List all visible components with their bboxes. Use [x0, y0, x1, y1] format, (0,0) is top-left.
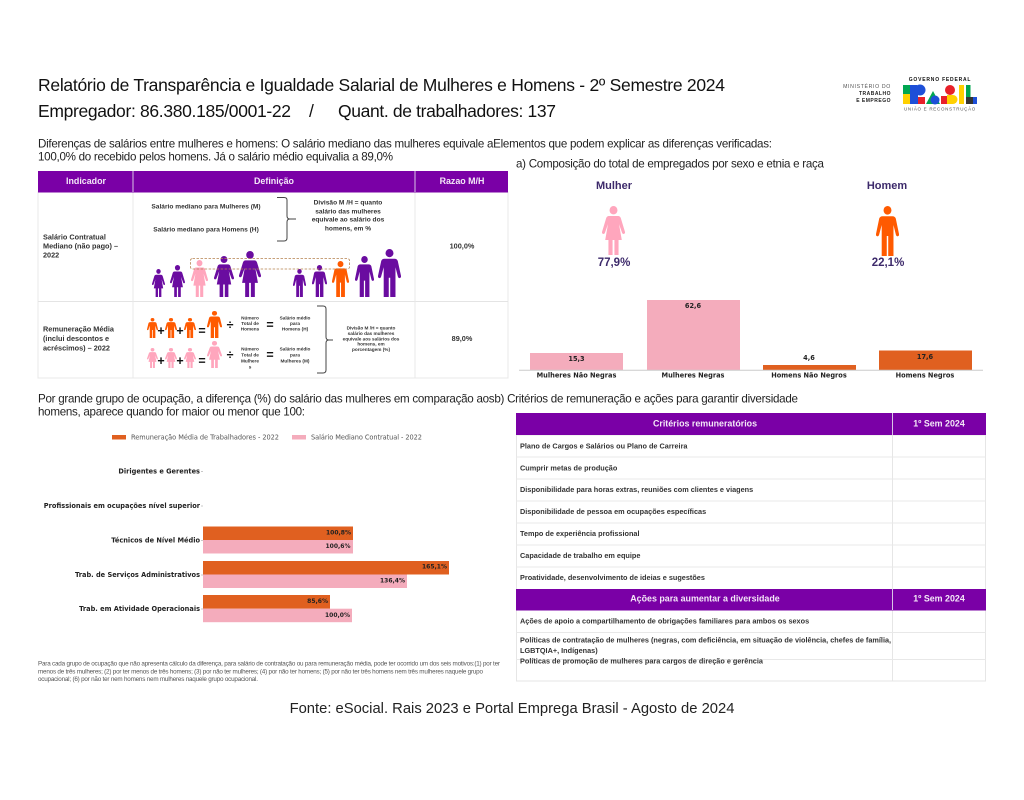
- action rows: Ações de apoio a compartilhamento de obrigações familiares para ambos os sexos: [520, 616, 809, 626]
- criteria rows: Disponibilidade para horas extras, reuniões com clientes e viagens: [520, 485, 753, 494]
- row label: remuneração média: acréscimos) – 2022: [43, 344, 110, 352]
- bar: homens negros: 17,6: [917, 353, 934, 361]
- action rows: LGBTQIA+, Indígenas): [520, 646, 598, 655]
- equation: homens: Número: [241, 316, 259, 320]
- equation: mulheres: s: [249, 364, 252, 370]
- footnote: [38, 660, 500, 683]
- definition: divisão M/H mediano: homens, em %: [325, 226, 371, 232]
- bars: serviços administrativos: 165,1%: [422, 564, 447, 570]
- logo: ministério do trabalho e governo federal: [843, 77, 977, 112]
- logo: ministério do trabalho e governo federal: E EMPREGO: [856, 98, 891, 104]
- table header: Definição: [254, 176, 295, 186]
- logo: ministério do trabalho e governo federal: GOVERNO FEDERAL: [909, 77, 971, 83]
- equation: mulheres: Salário médio: [280, 346, 311, 352]
- logo: ministério do trabalho e governo federal: UNIÃO E RECONSTRUÇÃO: [904, 106, 976, 112]
- panel: tabela de indicadores: [38, 171, 508, 378]
- table header: [38, 171, 508, 192]
- equation: mulheres: para: [290, 352, 300, 358]
- homem: 22,1%: [872, 257, 904, 269]
- criteria rows: Plano de Cargos e Salários ou Plano de Carreira: [520, 442, 688, 450]
- equation: homens: +: [157, 324, 165, 338]
- legend: [112, 434, 422, 442]
- action rows: [520, 616, 891, 666]
- equation: homens: Total de: [241, 321, 259, 326]
- heading: diferença por grande grupo de ocupação: Por grande grupo de ocupação, a diferença (%) do salário das mulheres em comparação aosb) Critérios de remuneração e ações para garantir diversidade: [38, 392, 798, 406]
- criteria rows: Cumprir metas de produção: [520, 464, 618, 472]
- panel: composição por sexo: [596, 180, 907, 269]
- header: ações para aumentar a diversidade: [516, 589, 986, 610]
- footnote: ocupacional; (6) por não ter nem homens nem mulheres naquele grupo ocupacional.: [38, 676, 258, 683]
- equation: mulheres: Mulhere: [241, 358, 259, 364]
- heading: composição do total de empregados: a) Composição do total de empregados por sexo e etnia e raça: [516, 158, 825, 170]
- bars: técnicos de nível médio: 100,8%: [326, 530, 351, 536]
- definition: salário mediano labels: Salário mediano para Mulheres (M): [151, 204, 261, 210]
- equation: homens: Homens (H): [282, 326, 309, 332]
- mulher: Mulher: [596, 180, 633, 192]
- row label: salário contratual mediano: 2022: [43, 250, 59, 260]
- dashed box: medianas: [190, 258, 350, 269]
- footnote: menos de três mulheres; (2) por ter menos de três homens; (3) por não ter mulheres; (4) por não ter homens; (5) por não ter três homens nem três mulheres naquele grupo: [38, 668, 483, 676]
- bar: mulheres negras: Mulheres Negras: [662, 372, 725, 380]
- row label: remuneração média: (inclui descontos e: [43, 334, 109, 343]
- equation: mulheres: Total de: [241, 352, 259, 358]
- row label: remuneração média: Remuneração Média: [43, 324, 115, 334]
- definition: divisão M/H média: salário das mulheres: [348, 331, 395, 336]
- logo: ministério do trabalho e governo federal: TRABALHO: [859, 91, 891, 97]
- bar chart: empregados por sexo e raça: [519, 300, 983, 380]
- intro text: diferenças de salários: [38, 138, 772, 164]
- mulher: [596, 180, 633, 269]
- chart: diferença por ocupação: [44, 434, 449, 622]
- intro text: diferenças de salários: Diferenças de salários entre mulheres e homens: O salário mediano das mulheres equivale aElementos que podem explicar as diferenças verificadas:: [38, 138, 772, 150]
- equation: homens: =: [266, 318, 274, 332]
- criteria rows: [520, 442, 753, 582]
- title: Relatório de Transparência e Igualdade Salarial de Mulheres e Homens - 2º Semestre 2024: [38, 75, 725, 95]
- header: ações para aumentar a diversidade: 1º Sem 2024: [913, 594, 965, 604]
- equation: homens: Salário médio: [280, 316, 311, 320]
- definition: salário mediano labels: [151, 204, 261, 234]
- title: Empregador: 86.380.185/0001-22: [38, 101, 291, 121]
- equation: homens: =: [198, 324, 206, 338]
- equation: mulheres: Mulheres (M): [281, 358, 310, 364]
- criteria rows: Capacidade de trabalho em equipe: [520, 551, 640, 560]
- category labels: Trab. de Serviços Administrativos: [75, 571, 200, 579]
- logo: ministério do trabalho e governo federal: MINISTÉRIO DO: [843, 83, 891, 90]
- heading: diferença por grande grupo de ocupação: [38, 392, 798, 418]
- definition: divisão M/H média: homens, em: [357, 342, 385, 346]
- equation: homens: Homens: [241, 326, 260, 332]
- criteria rows: Proatividade, desenvolvimento de ideias e sugestões: [520, 573, 705, 582]
- equation: mulheres: ÷: [227, 348, 234, 362]
- equation: mulheres: =: [266, 348, 274, 362]
- legend: Remuneração Média de Trabalhadores - 2022: [131, 434, 279, 442]
- definition: divisão M/H mediano: Divisão M /H = quanto: [314, 200, 382, 206]
- mulher: 77,9%: [598, 257, 630, 269]
- equation: mulheres: Número: [241, 346, 259, 352]
- equation: homens: [147, 311, 311, 338]
- bar: mulheres negras: [647, 300, 740, 380]
- icons: fila de homens: [293, 249, 401, 297]
- title: /: [309, 101, 314, 121]
- bar: homens não negros: Homens Não Negros: [771, 372, 847, 380]
- equation: mulheres: +: [176, 354, 184, 368]
- row label: salário contratual mediano: Salário Contratual: [43, 232, 106, 242]
- value: razão média: 89,0%: [452, 334, 473, 343]
- panel: critérios e ações: [516, 413, 986, 681]
- action rows: Políticas de contratação de mulheres (negras, com deficiência, em situação de violência, chefes de família,: [520, 636, 891, 644]
- definition: divisão M/H mediano: [312, 200, 385, 232]
- category labels: Trab. em Atividade Operacionais: [79, 605, 200, 613]
- definition: divisão M/H média: Divisão M /H = quanto: [347, 326, 396, 330]
- equation: homens: ÷: [227, 318, 234, 332]
- title: [38, 75, 725, 121]
- heading: diferença por grande grupo de ocupação: homens, aparece quando for maior ou menor que 100:: [38, 406, 305, 418]
- definition: divisão M/H mediano: salário das mulheres: [315, 208, 381, 216]
- definition: divisão M/H média: [343, 326, 400, 352]
- bars: atividade operacionais: 85,6%: [307, 598, 328, 605]
- table header: Razao M/H: [440, 176, 484, 186]
- bar: mulheres negras: 62,6: [685, 302, 702, 310]
- category labels: [44, 468, 203, 613]
- value: razão mediana: 100,0%: [450, 242, 475, 250]
- criteria rows: Disponibilidade de pessoa em ocupações específicas: [520, 507, 706, 516]
- definition: divisão M/H média: equivale aos salários dos: [343, 336, 400, 342]
- header: critérios remuneratórios: [516, 413, 986, 435]
- definition: salário mediano labels: Salário mediano para Homens (H): [153, 226, 259, 234]
- equation: mulheres: =: [198, 354, 206, 368]
- bars: técnicos de nível médio: [203, 526, 353, 554]
- brace: mediano: [277, 198, 296, 241]
- category labels: Dirigentes e Gerentes: [118, 468, 200, 476]
- bar: mulheres não negras: [530, 353, 623, 380]
- bar: homens não negros: 4,6: [803, 354, 815, 362]
- bars: atividade operacionais: 100,0%: [325, 612, 350, 619]
- legend: Salário Mediano Contratual - 2022: [311, 434, 422, 442]
- bar: homens negros: Homens Negros: [896, 372, 954, 380]
- equation: mulheres: [147, 341, 311, 370]
- row label: remuneração média: [43, 324, 115, 352]
- action rows: Políticas de promoção de mulheres para cargos de direção e gerência: [520, 656, 764, 666]
- criteria rows: Tempo de experiência profissional: [520, 529, 640, 538]
- footnote: Para cada grupo de ocupação que não apresenta cálculo da diferença, para salário de contratação ou para remuneração média, pode ter ocorrido um dos seis motivos:(1) por ter: [38, 660, 500, 668]
- row label: salário contratual mediano: [43, 232, 118, 260]
- bar: mulheres não negras: Mulheres Não Negras: [537, 372, 616, 380]
- header: critérios remuneratórios: 1º Sem 2024: [913, 418, 965, 428]
- row label: salário contratual mediano: Mediano (não pago) –: [43, 242, 118, 250]
- brace: média: [317, 306, 333, 373]
- homem: [867, 180, 907, 269]
- equation: homens: +: [176, 324, 184, 338]
- table header: Indicador: [66, 176, 107, 186]
- bar: homens não negros: [763, 354, 856, 380]
- bars: serviços administrativos: [203, 561, 449, 588]
- category labels: Técnicos de Nível Médio: [111, 536, 200, 544]
- title: Quant. de trabalhadores: 137: [338, 101, 556, 121]
- source: Fonte: eSocial. Rais 2023 e Portal Emprega Brasil - Agosto de 2024: [290, 701, 734, 717]
- category labels: Profissionais em ocupações nível superior: [44, 502, 201, 510]
- header: critérios remuneratórios: Critérios remuneratórios: [653, 418, 757, 428]
- homem: Homem: [867, 180, 907, 192]
- bars: técnicos de nível médio: 100,6%: [326, 543, 350, 550]
- intro text: diferenças de salários: 100,0% do recebido pelos homens. Já o salário médio equivalia a 89,0%: [38, 150, 393, 164]
- header: ações para aumentar a diversidade: Ações para aumentar a diversidade: [630, 594, 780, 604]
- icons: fila de mulheres: [152, 251, 261, 297]
- bar: homens negros: [879, 350, 972, 380]
- equation: homens: para: [290, 321, 300, 326]
- bars: atividade operacionais: [203, 595, 352, 622]
- definition: divisão M/H mediano: equivale ao salário dos: [312, 216, 385, 224]
- bar: mulheres não negras: 15,3: [568, 355, 585, 363]
- bars: serviços administrativos: 136,4%: [380, 578, 405, 584]
- definition: divisão M/H média: porcentagem (%): [352, 347, 390, 352]
- equation: mulheres: +: [157, 354, 165, 368]
